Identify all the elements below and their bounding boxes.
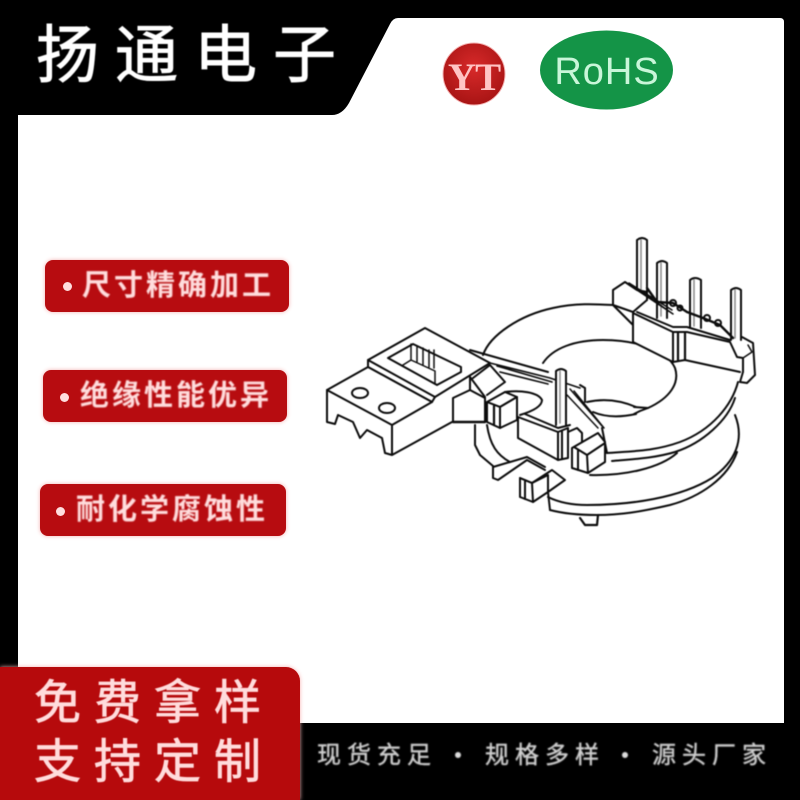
center pin: [556, 369, 566, 425]
square post: [453, 365, 505, 422]
bottom tab: [520, 470, 598, 525]
feature tag: precision machining: [45, 260, 289, 312]
terminal block right: [613, 282, 755, 383]
icon: RoHS badge: [540, 30, 673, 110]
ring and flanges: [475, 304, 739, 515]
feature tag: precision machining: 尺寸精确加工: [82, 270, 274, 302]
CTA line 2: 支持定制: [34, 735, 274, 788]
feature tag: chemical resistance: 耐化学腐蚀性: [76, 494, 268, 526]
bottom slogan: 现货充足: [317, 742, 437, 769]
pins right: [637, 238, 741, 340]
bottom slogan: 源头厂家: [652, 742, 772, 769]
clip at ring: [487, 391, 542, 428]
bottom slogan: 规格多样: [485, 742, 605, 769]
feature tag: insulation: 绝缘性能优异: [80, 380, 272, 412]
call to action: free samples, custom: [0, 667, 300, 800]
feature tag: insulation: [43, 370, 287, 422]
left mounting plate: [327, 328, 490, 455]
CTA line 1: 免费拿样: [34, 676, 274, 729]
connecting bars and center block: [470, 350, 607, 460]
icon: RoHS badge: RoHS: [554, 51, 660, 93]
icon: YT logo: YT: [448, 56, 501, 99]
title: 扬通电子: [36, 21, 352, 91]
feature tag: chemical resistance: [40, 484, 286, 536]
small locking tab: [572, 433, 605, 473]
icon: YT logo: [442, 42, 506, 106]
bottom slogan: [317, 742, 772, 769]
